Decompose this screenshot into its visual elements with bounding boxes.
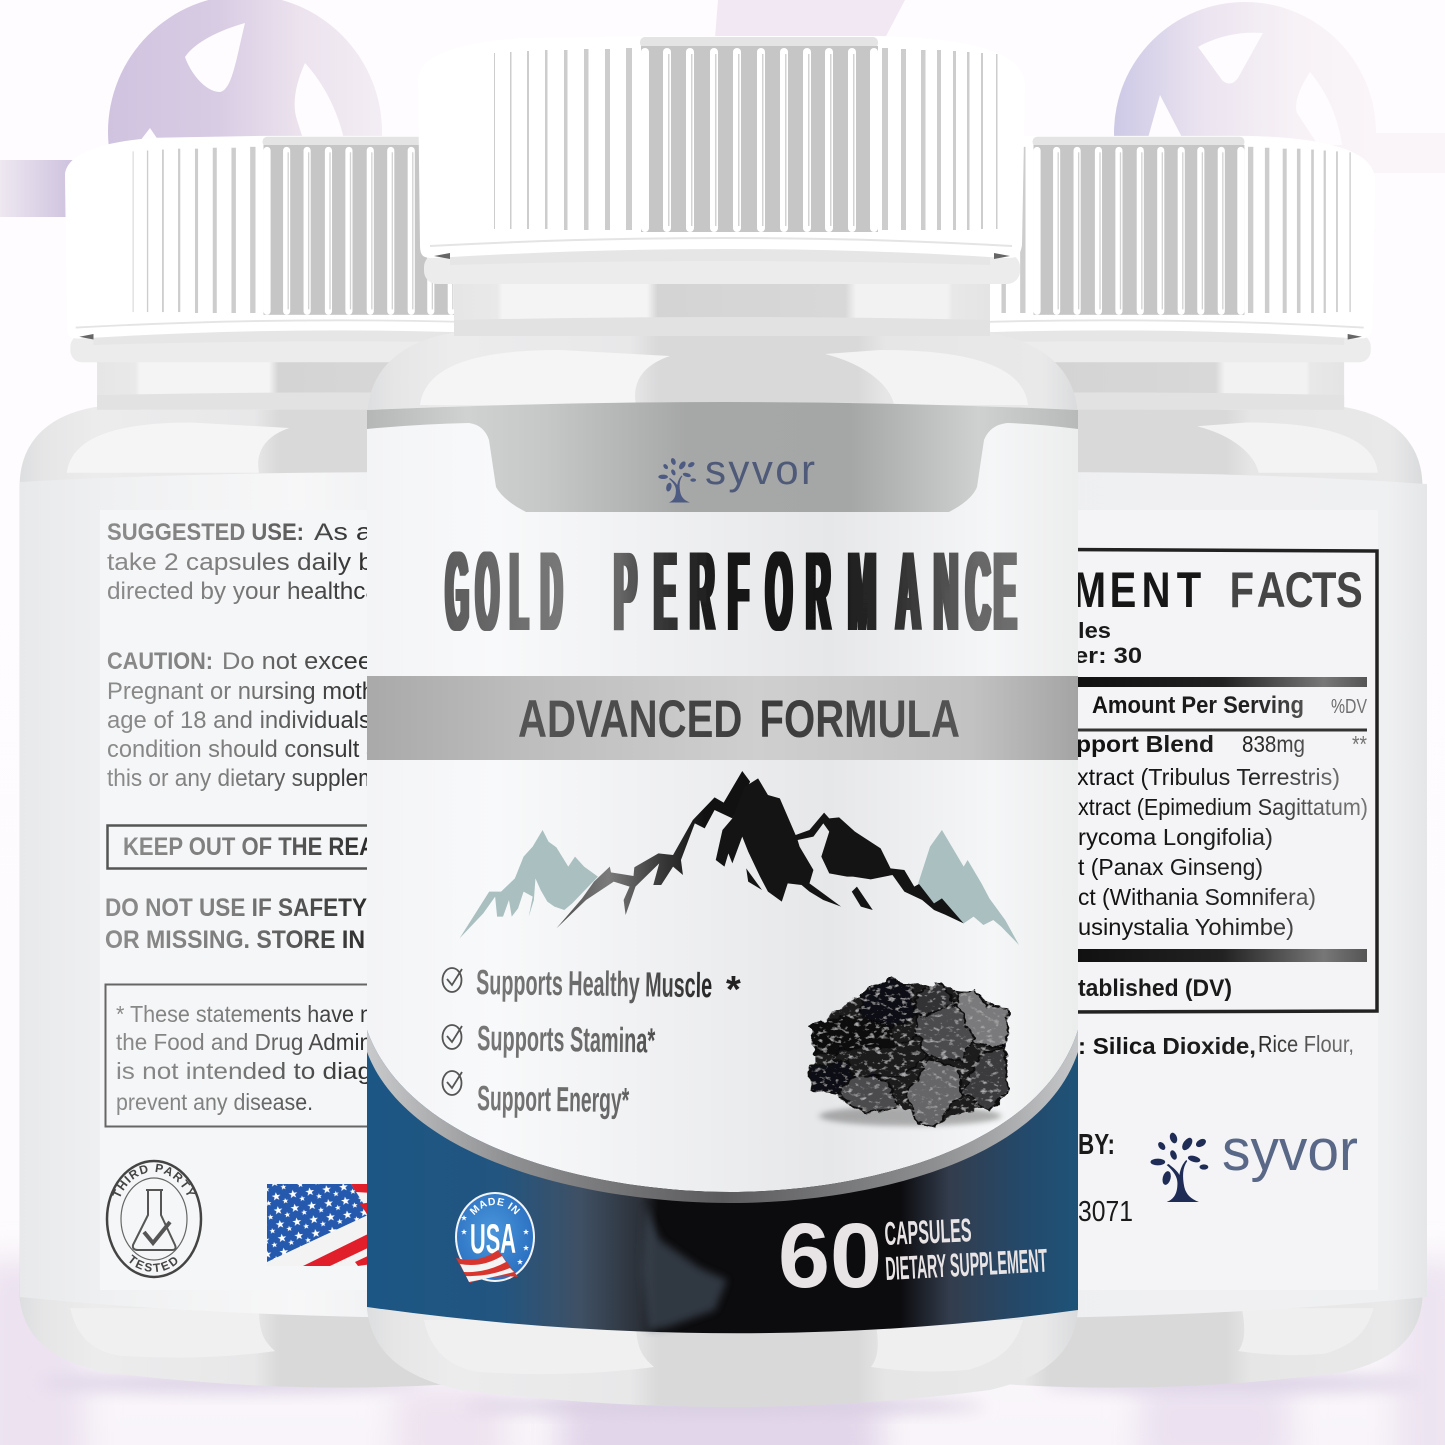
FDA disclaimer box: the Food and Drug Admin (116, 1029, 372, 1055)
supplement facts box (1060, 550, 1377, 1012)
suggested use text: As a (314, 519, 373, 546)
caution text: CAUTION: (107, 648, 213, 675)
advanced formula band: ADVANCED FORMULA (518, 690, 960, 749)
manufacturer text (1078, 1129, 1133, 1228)
other ingredients: Rice Flour, (1258, 1031, 1354, 1057)
serving size: les (1078, 618, 1111, 643)
daily value note: tablished (DV) (1078, 975, 1232, 1002)
benefit text: Support Energy* (477, 1079, 630, 1120)
amount header: Amount Per Serving (1092, 692, 1304, 719)
ingredient list: ct (Withania Somnifera) (1078, 884, 1316, 910)
facts heading (1073, 562, 1363, 618)
other ingredients: : Silica Dioxide, (1078, 1033, 1256, 1059)
icon: third party tested seal: TESTED (129, 1254, 178, 1272)
safety warning: DO NOT USE IF SAFETY (105, 894, 367, 922)
icon: third party tested seal (106, 1160, 202, 1278)
left bottle label (20, 472, 420, 1318)
made in usa badge: USA (470, 1215, 516, 1262)
benefit text: Supports Stamina* (477, 1019, 656, 1060)
ingredient list: pport Blend (1076, 731, 1214, 757)
safety warning: OR MISSING. STORE IN (105, 926, 365, 954)
mountain illustration (460, 771, 1019, 945)
suggested use text (107, 519, 380, 605)
made in usa badge: MADE IN (470, 1198, 520, 1215)
keep out of reach box (108, 826, 388, 868)
ingredient list: t (Panax Ginseng) (1078, 854, 1263, 880)
amount header (1060, 677, 1368, 732)
capsule count: CAPSULES (884, 1211, 972, 1252)
amount header: %DV (1331, 696, 1368, 718)
benefit text: * (726, 969, 741, 1011)
capsule count (778, 1205, 1048, 1307)
FDA disclaimer box: * These statements have n (116, 1001, 372, 1027)
other ingredients (1078, 1031, 1354, 1059)
center bottle (367, 36, 1078, 1407)
ingredient list: xtract (Epimedium Sagittatum) (1078, 794, 1368, 820)
right bottle label (1030, 472, 1427, 1318)
caution text: this or any dietary supplem (107, 765, 377, 792)
caution text: Do not excee (222, 648, 372, 675)
blue bottom band (367, 1030, 1078, 1333)
caution text: condition should consult a (107, 736, 380, 763)
ingredient list: rycoma Longifolia) (1078, 824, 1273, 850)
suggested use text: directed by your healthca (107, 578, 380, 605)
facts heading: MENT (1073, 562, 1202, 618)
check icons (442, 968, 462, 1095)
FDA disclaimer box (106, 984, 388, 1126)
manufacturer text: 3071 (1078, 1196, 1133, 1228)
logo syvor (658, 446, 815, 502)
logo syvor: syvor (705, 446, 815, 493)
advanced formula band (367, 676, 1078, 760)
ingredient list (1076, 731, 1368, 940)
made in usa badge (455, 1192, 535, 1283)
ingredient list: xtract (Tribulus Terrestris) (1077, 764, 1340, 790)
left bottle (back panel) (20, 136, 454, 1388)
serving size: er: 30 (1074, 643, 1142, 668)
keep out of reach box: KEEP OUT OF THE REA (123, 833, 375, 861)
suggested use text: take 2 capsules daily b (107, 549, 373, 576)
center label: DIETARY SUPPLEMENT (884, 1242, 1048, 1287)
icon: third party tested seal: THIRD PARTY (112, 1164, 195, 1196)
ingredient list: ** (1352, 731, 1367, 757)
benefit text (476, 963, 741, 1120)
right bottle shape (790, 136, 1422, 1388)
syvor logo, back: syvor (1222, 1118, 1358, 1183)
FDA disclaimer box: is not intended to diag (116, 1058, 372, 1084)
benefit list (442, 963, 741, 1120)
left bottle shape (20, 136, 652, 1388)
serving size (1074, 618, 1142, 668)
ingredient list: usinystalia Yohimbe) (1078, 914, 1294, 940)
safety warning (105, 894, 367, 954)
syvor logo, back (1150, 1118, 1358, 1202)
caution text: age of 18 and individuals (107, 707, 371, 734)
daily value note (1060, 949, 1367, 1002)
center label (367, 402, 1078, 1334)
caution text: Pregnant or nursing moth (107, 678, 375, 705)
capsule count: 60 (778, 1205, 882, 1307)
FDA disclaimer box: prevent any disease. (116, 1089, 313, 1115)
icon: american flag (267, 1184, 377, 1266)
title: gold performance: PERFORMANCE (614, 528, 1016, 654)
top grey band and logo tab (367, 402, 1078, 512)
coal rocks (809, 978, 1007, 1127)
manufacturer text: BY: (1078, 1129, 1115, 1161)
benefit text: Supports Healthy Muscle (476, 963, 712, 1005)
caution text (107, 648, 380, 792)
center bottle shape (367, 36, 1078, 1407)
ingredient list: 838mg (1242, 731, 1305, 757)
title: gold performance: GOLD (446, 530, 562, 655)
right bottle (supplement facts panel) (790, 136, 1427, 1388)
suggested use text: SUGGESTED USE: (107, 519, 304, 546)
facts heading: FACTS (1230, 562, 1363, 618)
